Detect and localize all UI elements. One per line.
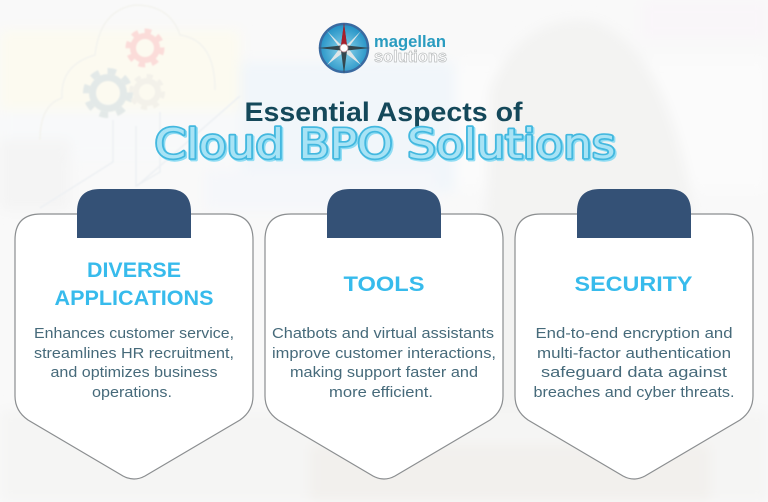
logo wordmark: solutions: solutions [374, 48, 447, 66]
gear pink [128, 31, 162, 65]
gear grey [86, 71, 130, 115]
body text: Chatbots and virtual assistants [272, 325, 494, 342]
heading [54, 259, 214, 310]
title line 1: Essential Aspects of [244, 97, 524, 127]
background cloud outline [40, 5, 215, 140]
card shape [515, 214, 753, 479]
body text: End-to-end encryption and [536, 325, 732, 342]
panel: security [515, 189, 753, 479]
body text [34, 325, 234, 401]
heading: APPLICATIONS [54, 287, 214, 310]
card shape [15, 214, 253, 479]
title line 2: Cloud BPO Solutions [154, 120, 616, 168]
background gears [86, 31, 163, 115]
icon: compass [318, 23, 370, 74]
body text: and optimizes business [50, 364, 218, 381]
body text: Enhances customer service, [34, 325, 234, 342]
body text: multi-factor authentication [537, 345, 731, 362]
body text: more efficient. [329, 384, 433, 401]
body text: streamlines HR recruitment, [34, 345, 234, 362]
background diagonal lines [40, 96, 240, 208]
heading: SECURITY [574, 273, 692, 296]
title line 2: Cloud BPO Solutions [154, 120, 616, 168]
panel: tools [265, 189, 503, 479]
tab [577, 189, 691, 238]
heading: DIVERSE [87, 259, 181, 282]
body text: operations. [92, 384, 172, 401]
heading: TOOLS [344, 273, 424, 296]
logo [318, 23, 447, 74]
title [154, 97, 617, 170]
title line 2: Cloud BPO Solutions [156, 122, 617, 170]
panel: diverse applications [15, 189, 253, 479]
body text [272, 325, 496, 401]
card shape [265, 214, 503, 479]
body text: making support faster and [290, 364, 478, 381]
body text [534, 325, 734, 401]
tab [327, 189, 441, 238]
gear beige [131, 76, 163, 108]
tab [77, 189, 191, 238]
body text: breaches and cyber threats. [534, 384, 734, 401]
body text: improve customer interactions, [272, 345, 496, 362]
body text: safeguard data against [541, 364, 728, 381]
logo wordmark: magellan: magellan [374, 33, 446, 51]
